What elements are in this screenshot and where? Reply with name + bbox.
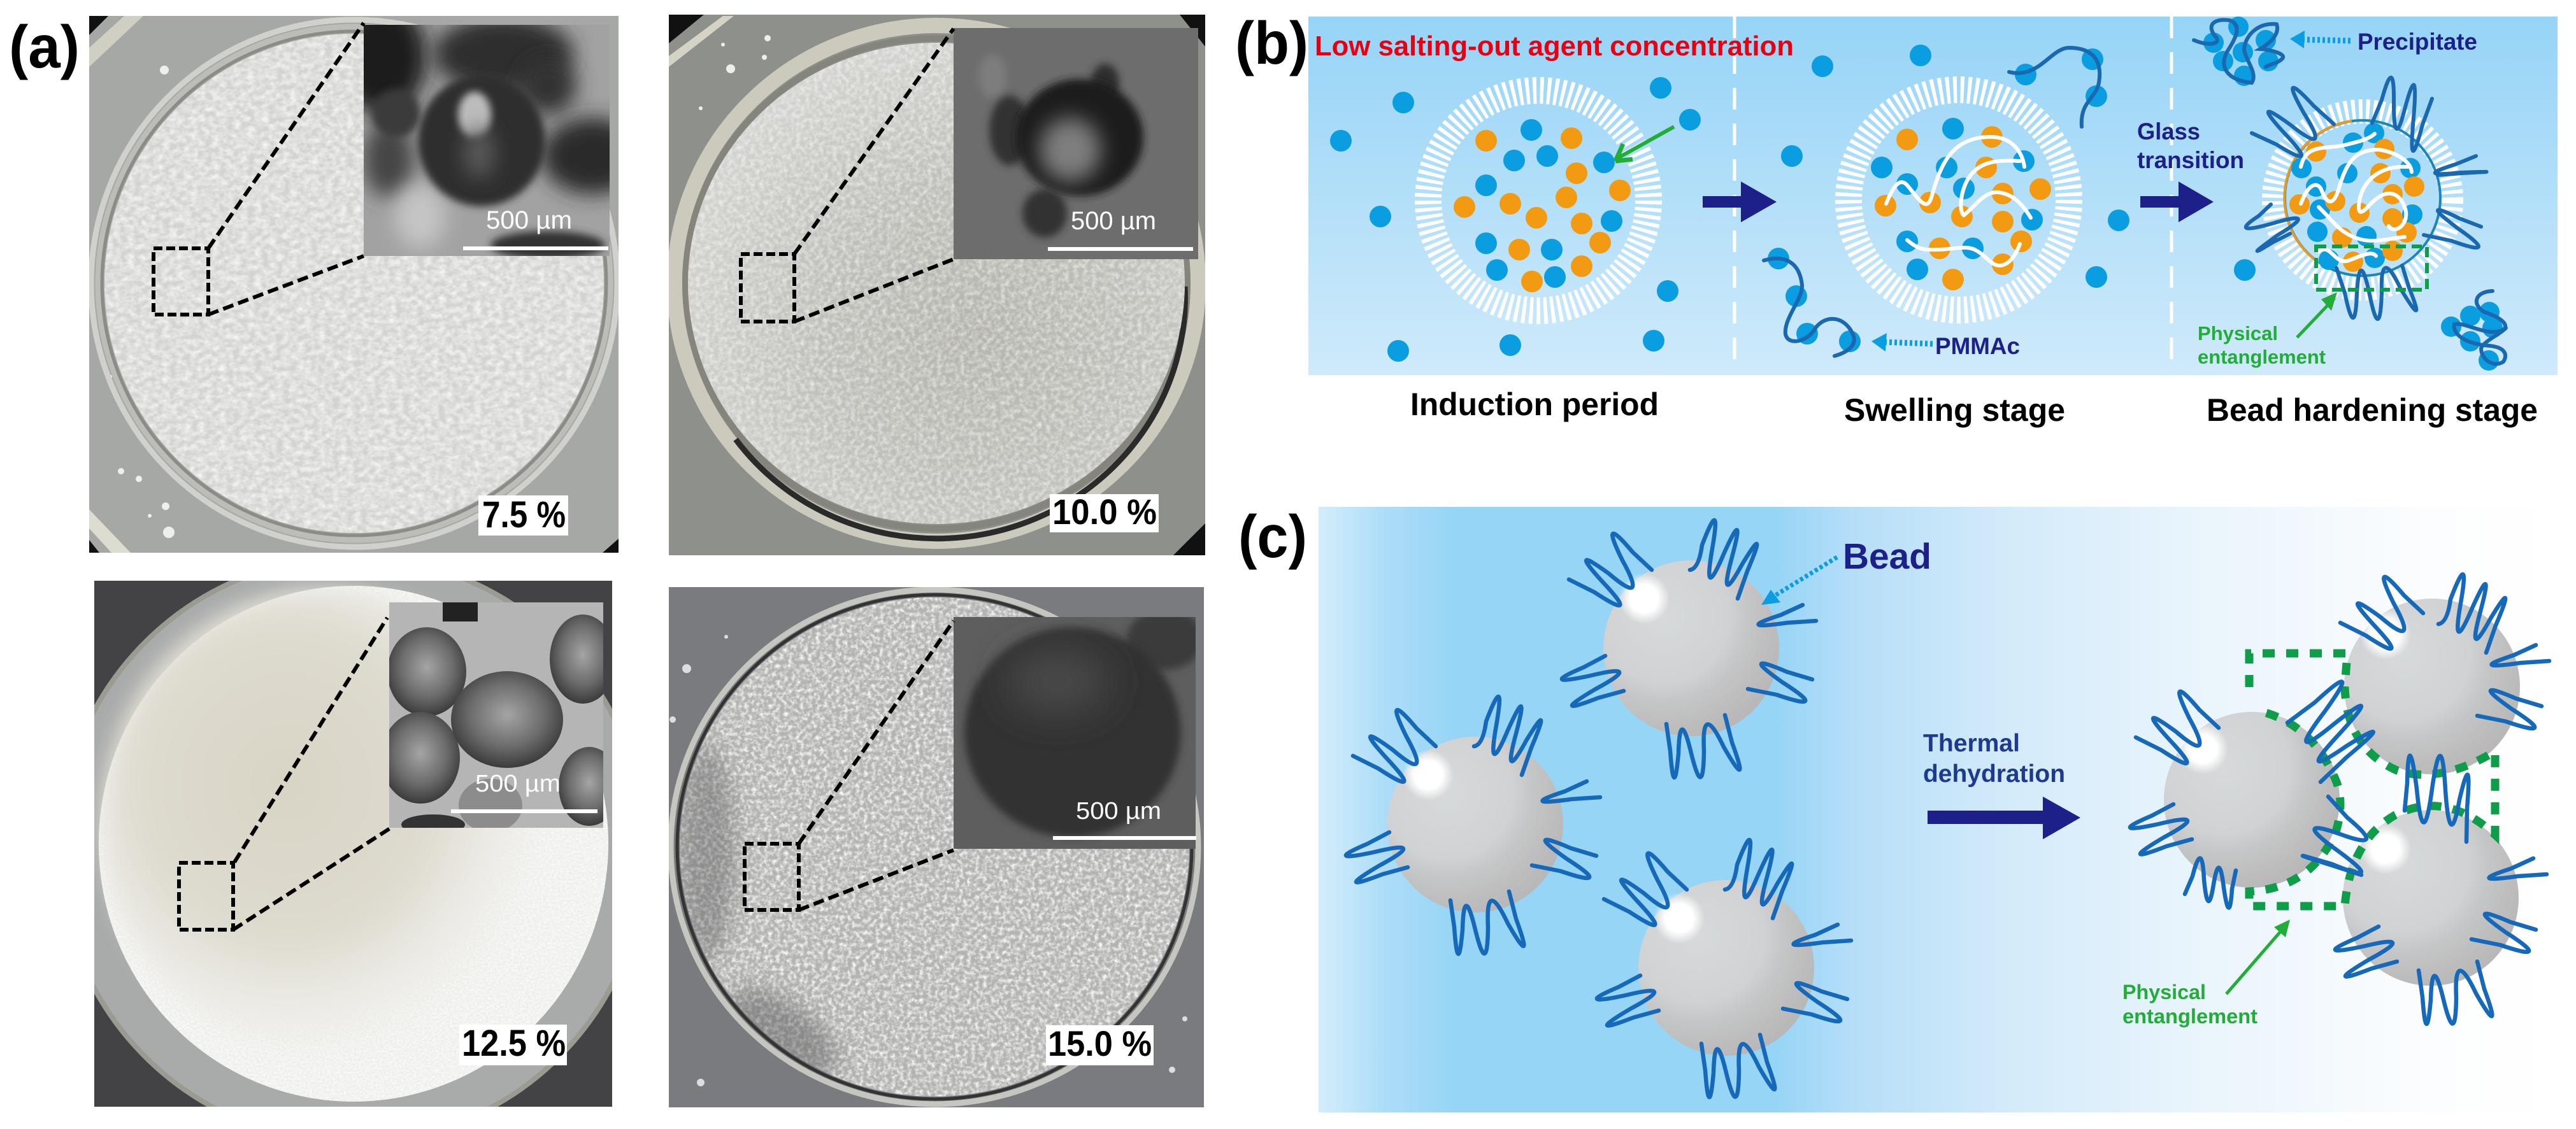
panel b: background — [1308, 17, 2558, 375]
scale bar and label: 10.0 %: 500 µm — [1071, 207, 1156, 235]
bead spheres — [2164, 599, 2520, 986]
monomer dots — [1781, 45, 2129, 288]
scale bar and label: 10.0 % — [1048, 207, 1193, 251]
cluster: three entangled beads — [2130, 574, 2549, 1024]
label: thermal dehydration — [1923, 730, 2065, 788]
arrow: swelling to hardening — [2140, 181, 2214, 222]
heading: panel a label: (a) — [9, 13, 80, 81]
label: glass transition — [2137, 118, 2244, 173]
heading: bead hardening stage: Bead hardening stage — [2207, 392, 2538, 428]
scale bar and label: 7.5 %: 500 µm — [486, 206, 572, 234]
panel a2: 10.0 % petri dish photo — [669, 15, 1205, 555]
droplet shell — [2274, 111, 2451, 288]
inset: 7.5 % bead micrograph — [364, 25, 610, 256]
diagram: bead hardening stage — [2234, 78, 2487, 319]
callout: PMMAc: PMMAc — [1935, 333, 2020, 359]
inset: 12.5 % bead micrograph — [389, 602, 603, 828]
callout: bead — [1761, 536, 1931, 605]
green arrow — [1615, 127, 1674, 161]
callout: physical entanglement (c) — [2122, 920, 2290, 1028]
heading: swelling stage: Swelling stage — [1844, 392, 2065, 428]
callout: physical entanglement (b): Physical — [2198, 322, 2278, 344]
inset: 15.0 % bead micrograph — [954, 609, 1203, 849]
zoom callout lines: 12.5 % — [179, 618, 390, 930]
stage dividers — [1735, 17, 2172, 361]
panel a3: 12.5 % petri dish photo — [94, 581, 612, 1107]
callout: precipitate — [2290, 29, 2477, 55]
label: thermal dehydration: dehydration — [1923, 760, 2065, 788]
initiator dots — [1875, 126, 2051, 290]
PMMAc chain lower left — [1764, 248, 1861, 356]
bead: top — [1562, 520, 1816, 778]
panel a1: 7.5 % petri dish photo — [89, 16, 619, 553]
heading: induction period: Induction period — [1410, 387, 1659, 422]
zoom callout lines: 10.0 % — [741, 29, 954, 322]
callout: bead: Bead — [1843, 536, 1931, 577]
zoom callout lines: 7.5 % — [154, 23, 364, 315]
panel a4: 15.0 % petri dish photo — [669, 587, 1204, 1107]
diagram: induction period — [1330, 77, 1701, 362]
callout: physical entanglement (c): Physical — [2122, 981, 2206, 1004]
droplet shell — [1428, 90, 1649, 311]
arrow: induction to swelling — [1703, 181, 1777, 222]
label: glass transition: transition — [2137, 147, 2244, 173]
inset: 10.0 % bead micrograph — [954, 28, 1198, 259]
bead: lower left — [1346, 697, 1600, 954]
monomer outside droplet — [1330, 77, 1701, 362]
zoom callout lines: 15.0 % — [745, 621, 954, 910]
panel c: background — [1319, 507, 2555, 1112]
callout: precipitate: Precipitate — [2358, 29, 2477, 55]
concentration label: 7.5 %: 7.5 % — [482, 494, 566, 536]
scale bar and label: 12.5 %: 500 µm — [475, 770, 561, 797]
concentration label: 15.0 %: 15.0 % — [1048, 1023, 1152, 1063]
callout: physical entanglement (b): entanglement — [2198, 346, 2326, 368]
polymer tentacles — [2130, 574, 2549, 1024]
white chains — [2301, 134, 2412, 261]
bead outline — [2285, 120, 2440, 276]
bead: bottom — [1597, 840, 1851, 1097]
heading: panel b label: (b) — [1235, 10, 1308, 77]
concentration label: 12.5 %: 12.5 % — [462, 1023, 566, 1064]
scale bar and label: 15.0 % — [1053, 798, 1196, 840]
monomer inside droplet — [1475, 119, 1622, 288]
label: thermal dehydration: Thermal — [1923, 730, 2020, 757]
droplet shell — [1849, 90, 2069, 310]
callout: physical entanglement (b) — [2198, 292, 2337, 368]
scale bar and label: 12.5 % — [451, 770, 597, 813]
concentration label: 10.0 %: 10.0 % — [1052, 492, 1157, 532]
polymer tentacles — [2246, 78, 2487, 319]
arrow: thermal dehydration — [1928, 797, 2080, 839]
entanglement dashed outline — [2249, 653, 2495, 906]
bead highlights — [2177, 609, 2411, 874]
diagram: swelling stage — [1764, 45, 2129, 356]
initiator inside droplet — [1454, 127, 1631, 292]
heading: low salting-out agent concentration: Low salting-out agent concentration — [1315, 31, 1794, 62]
precipitate cluster bottom — [2441, 291, 2506, 371]
precipitate cluster top — [2194, 17, 2283, 86]
scale bar and label: 15.0 %: 500 µm — [1076, 798, 1161, 825]
callout: PMMAc — [1871, 333, 2020, 359]
monomer dots — [2234, 123, 2422, 281]
initiator dots — [2289, 139, 2424, 272]
entanglement box — [2316, 246, 2427, 290]
PMMAc chain upper right — [2009, 48, 2107, 127]
label: glass transition: Glass — [2137, 118, 2200, 145]
heading: panel c label: (c) — [1238, 503, 1307, 571]
scale bar and label: 7.5 % — [463, 206, 608, 250]
callout: physical entanglement (c): entanglement — [2122, 1005, 2258, 1028]
growing white chains — [1886, 137, 2031, 266]
